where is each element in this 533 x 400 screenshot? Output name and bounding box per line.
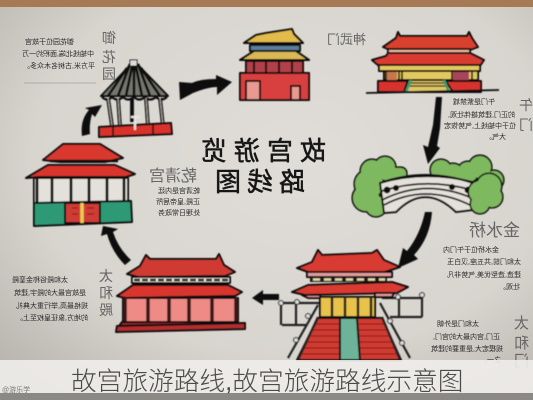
label: imperial garden vertical: 御 [102, 30, 116, 46]
note: golden water bridge [443, 245, 521, 291]
tree foliage in front of bridge [469, 174, 502, 213]
central mirrored title: 故宫游览 [194, 136, 326, 166]
label: Taihe hall vertical: 太 [99, 268, 113, 284]
note: Taihe gate: 之一。 [480, 355, 501, 364]
note: Meridian gate: 大气。 [485, 132, 506, 141]
bottom photo strip [0, 393, 533, 400]
pavilion: imperial garden [99, 60, 172, 137]
gate with yellow roofs [240, 29, 309, 100]
note: Qianqing palace: 处理日常政务 [158, 208, 200, 217]
stair rails [288, 303, 410, 360]
tree foliage behind bridge [353, 156, 503, 216]
main drawing [26, 29, 503, 360]
lower roof [292, 282, 408, 295]
arrow: bridge to Taihe gate [398, 212, 432, 268]
label: Meridian gate vertical [519, 97, 533, 133]
note: imperial garden: 御花园位于故宫 [25, 37, 74, 46]
note: imperial garden: 平方米,古树名木众多。 [23, 61, 95, 70]
arrow: Shenwu gate to bridge [423, 97, 442, 164]
note: Taihe hall: 太和殿俗称金銮殿 [12, 275, 68, 284]
label: Taihe gate vertical: 和 [514, 335, 529, 352]
note: Meridian gate: 位于中轴线上,气势恢宏 [444, 121, 516, 130]
left railing [281, 303, 320, 325]
note: Qianqing palace: 乾清宫是内廷 [158, 186, 200, 195]
label: golden water bridge: 金水桥 [469, 221, 520, 240]
bridge [380, 175, 473, 213]
label: Taihe hall vertical: 和 [99, 285, 113, 301]
caption band [0, 360, 533, 393]
note: Taihe gate: 正门,宫内最大的宫门, [433, 332, 500, 341]
label: imperial garden vertical [102, 30, 116, 82]
label: Meridian gate vertical: 门 [519, 117, 533, 133]
golden water bridge and trees [353, 156, 503, 216]
label: Taihe hall vertical: 殿 [99, 302, 113, 318]
note: Meridian gate [444, 97, 516, 141]
note: Qianqing palace [156, 186, 200, 217]
note: Meridian gate: 午门是紫禁城 [453, 97, 495, 106]
note: Taihe gate: 规模宏大,是重要的建筑 [431, 344, 503, 353]
upper roof [297, 250, 400, 272]
label: Taihe hall vertical [99, 268, 113, 318]
note: golden water bridge: 金水桥位于午门内 [443, 245, 499, 254]
note: imperial garden: 中轴线北端,面积约一万 [22, 49, 94, 58]
wooden table edge [0, 0, 533, 7]
note: golden water bridge: 太和门前,共五座,汉白玉 [447, 257, 521, 266]
note: Meridian gate: 的正门,建筑雄伟壮观, [448, 110, 515, 119]
Taihe hall [116, 254, 245, 332]
label: imperial garden vertical: 园 [102, 66, 116, 82]
arrow: pavilion to gate [179, 75, 232, 100]
Taihe gate hall and stairs [279, 250, 424, 360]
arrow: Taihe hall to Qianqing palace [101, 226, 131, 265]
right railing [382, 296, 422, 317]
note: imperial garden [22, 37, 96, 83]
note: Taihe hall: 规格最高,举行重大典礼 [16, 301, 88, 310]
watermark: @游乐学 [2, 385, 30, 394]
note: Qianqing palace: 正殿,皇帝居所 [156, 197, 200, 206]
central mirrored title [194, 136, 326, 197]
main hall: Shenwu gate [366, 32, 499, 93]
label: imperial garden vertical: 花 [102, 49, 116, 65]
label: Taihe gate vertical: 门 [514, 353, 529, 370]
label: Meridian gate vertical: 午 [519, 97, 533, 113]
note: golden water bridge: 壮观。 [499, 282, 520, 291]
arrow: left hall to pavilion [82, 105, 102, 136]
label: Taihe gate vertical [514, 315, 529, 370]
note: Taihe hall: 是故宫最大的殿宇,建筑 [14, 288, 86, 297]
label: Taihe gate vertical: 太 [514, 315, 529, 332]
arrow: Taihe gate to Taihe hall [252, 290, 279, 305]
note: Taihe gate [431, 319, 503, 364]
mirrored notes [12, 37, 521, 364]
yellow columns [320, 297, 375, 317]
Qianqing palace [26, 144, 135, 226]
caption: 故宫旅游路线,故宫旅游路线示意图 [71, 367, 463, 396]
central mirrored title: 路线图 [209, 167, 305, 197]
note: Taihe hall: 的地方,象征皇权至上。 [16, 313, 88, 322]
label: Shenwu gate: 神武门 [327, 32, 366, 47]
note: Taihe gate: 太和门是外朝 [437, 319, 479, 328]
mirrored building labels [99, 30, 533, 370]
label: Qianqing palace: 乾清宫 [149, 167, 197, 185]
stairs [297, 318, 401, 360]
note: Taihe hall [12, 275, 88, 322]
note: golden water bridge: 建造,造型优美,气势非凡 [447, 270, 521, 279]
